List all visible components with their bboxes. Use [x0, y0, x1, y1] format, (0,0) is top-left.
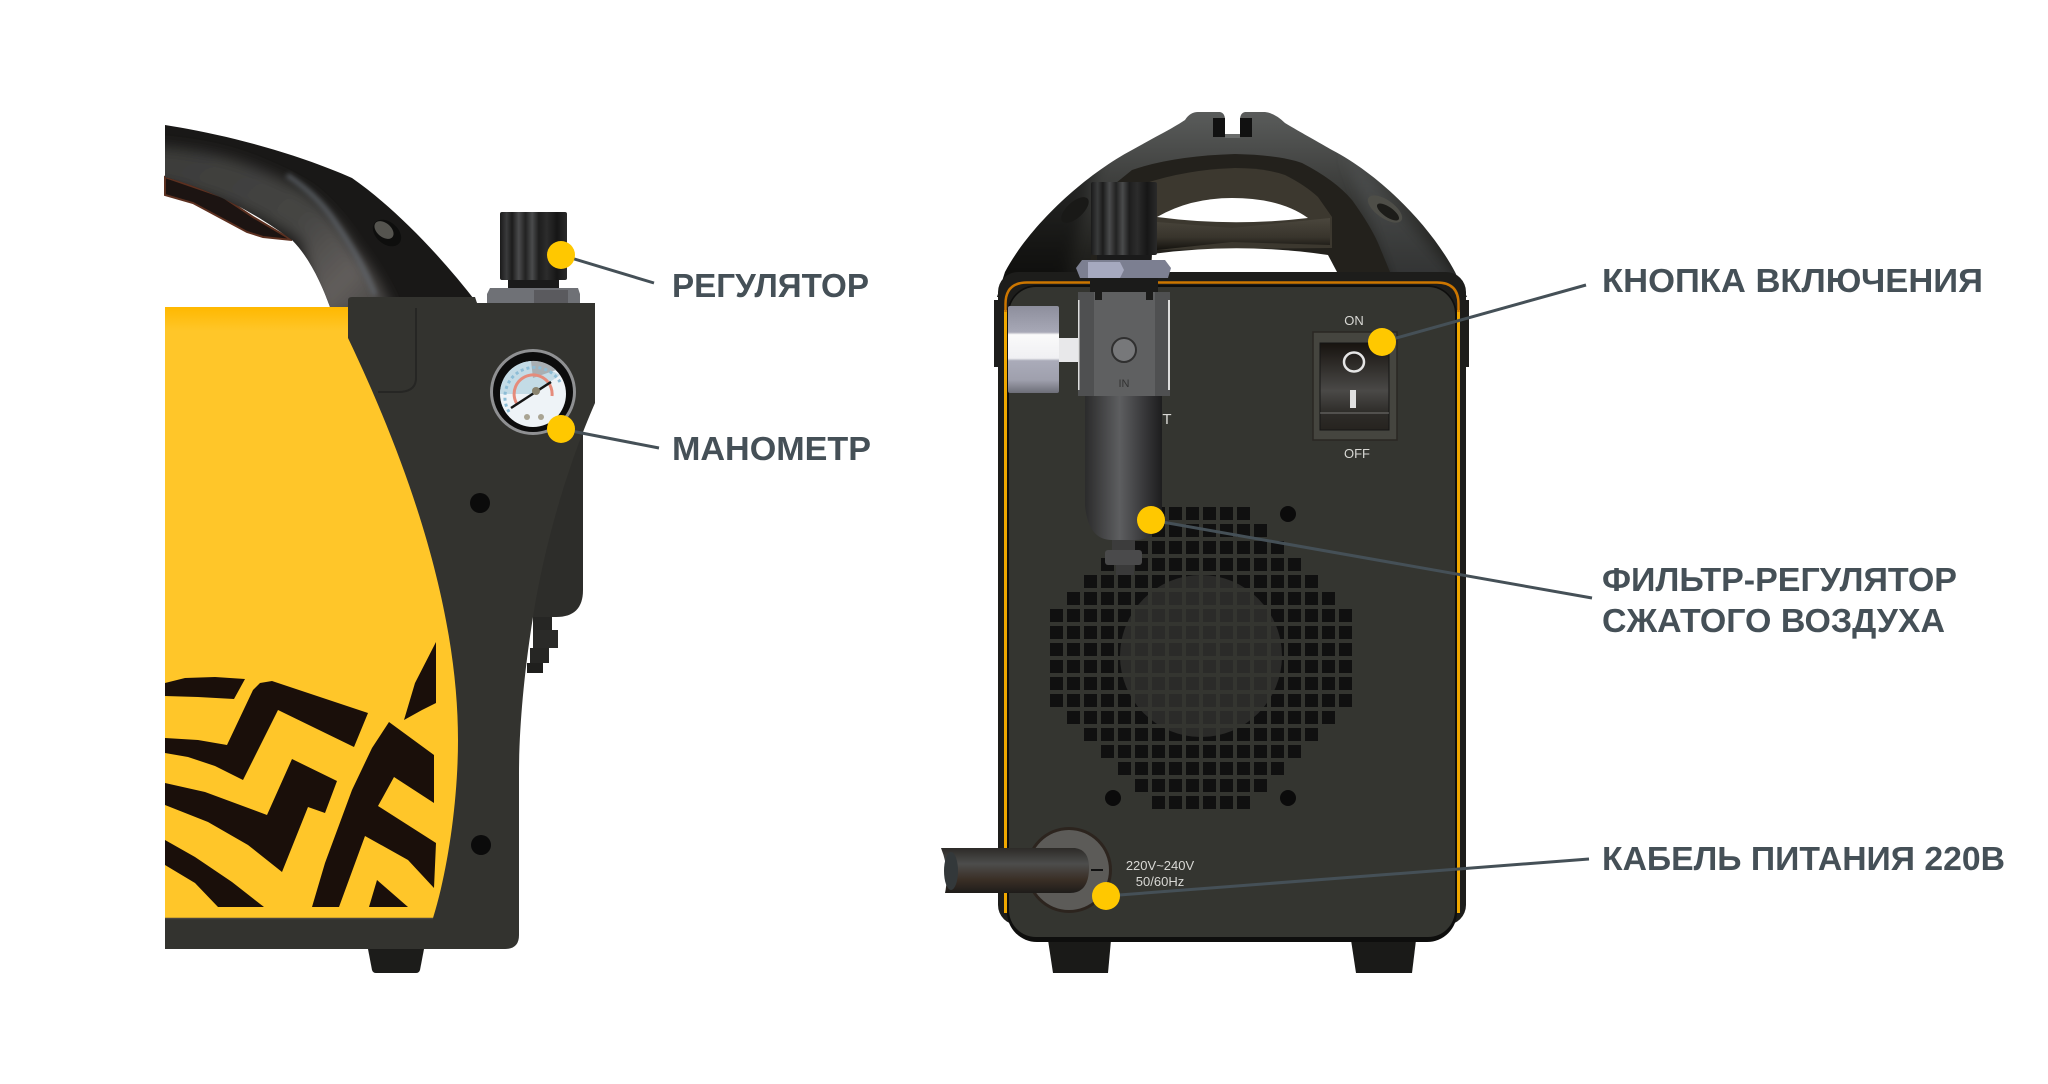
body shell: [994, 272, 1469, 925]
tread pattern graphic: [165, 642, 436, 907]
bracket seam: [378, 308, 416, 392]
label: regulator: РЕГУЛЯТОР: [672, 267, 869, 304]
right machine: rear view: [941, 112, 1480, 973]
regulator knob: [487, 212, 580, 303]
label: power button: КНОПКА ВКЛЮЧЕНИЯ: [1602, 262, 1983, 299]
voltage marking: 50/60Hz: [1136, 874, 1184, 889]
base seam: [165, 918, 433, 920]
power switch: ON: [1344, 313, 1364, 328]
power cable and gland: [941, 827, 1112, 913]
handle: side view: [164, 125, 477, 307]
rear box behind bracket: [520, 400, 583, 673]
feet: [1048, 940, 1416, 973]
power switch: OFF: [1344, 446, 1370, 461]
callout markers: [547, 241, 1396, 910]
IN marking: IN: [1118, 378, 1130, 390]
label: air filter-regulator: СЖАТОГО ВОЗДУХА: [1602, 602, 1945, 639]
air filter-regulator: [1008, 182, 1171, 575]
orange trim: [1006, 282, 1458, 913]
left machine: side view: [140, 125, 595, 973]
yellow side panel: [165, 307, 465, 923]
callout lines: [561, 255, 1592, 896]
pressure gauge: [490, 349, 576, 435]
label: air filter-regulator: [1602, 561, 1957, 639]
voltage marking: 220V~240V: [1126, 858, 1194, 873]
label: pressure gauge: МАНОМЕТР: [672, 430, 871, 467]
label: power cable: КАБЕЛЬ ПИТАНИЯ 220В: [1602, 840, 2005, 877]
screws: [470, 493, 491, 855]
voltage marking: [1126, 858, 1194, 889]
power switch: [1313, 313, 1397, 461]
handle: rear view: [990, 112, 1480, 300]
rear panel: [1007, 285, 1457, 942]
foot: [368, 949, 424, 973]
label: air filter-regulator: ФИЛЬТР-РЕГУЛЯТОР: [1602, 561, 1957, 598]
dark side bracket: [165, 297, 595, 949]
T marking: T: [1162, 411, 1172, 428]
panel screws: [1105, 506, 1296, 806]
fan grille: [1040, 498, 1360, 818]
